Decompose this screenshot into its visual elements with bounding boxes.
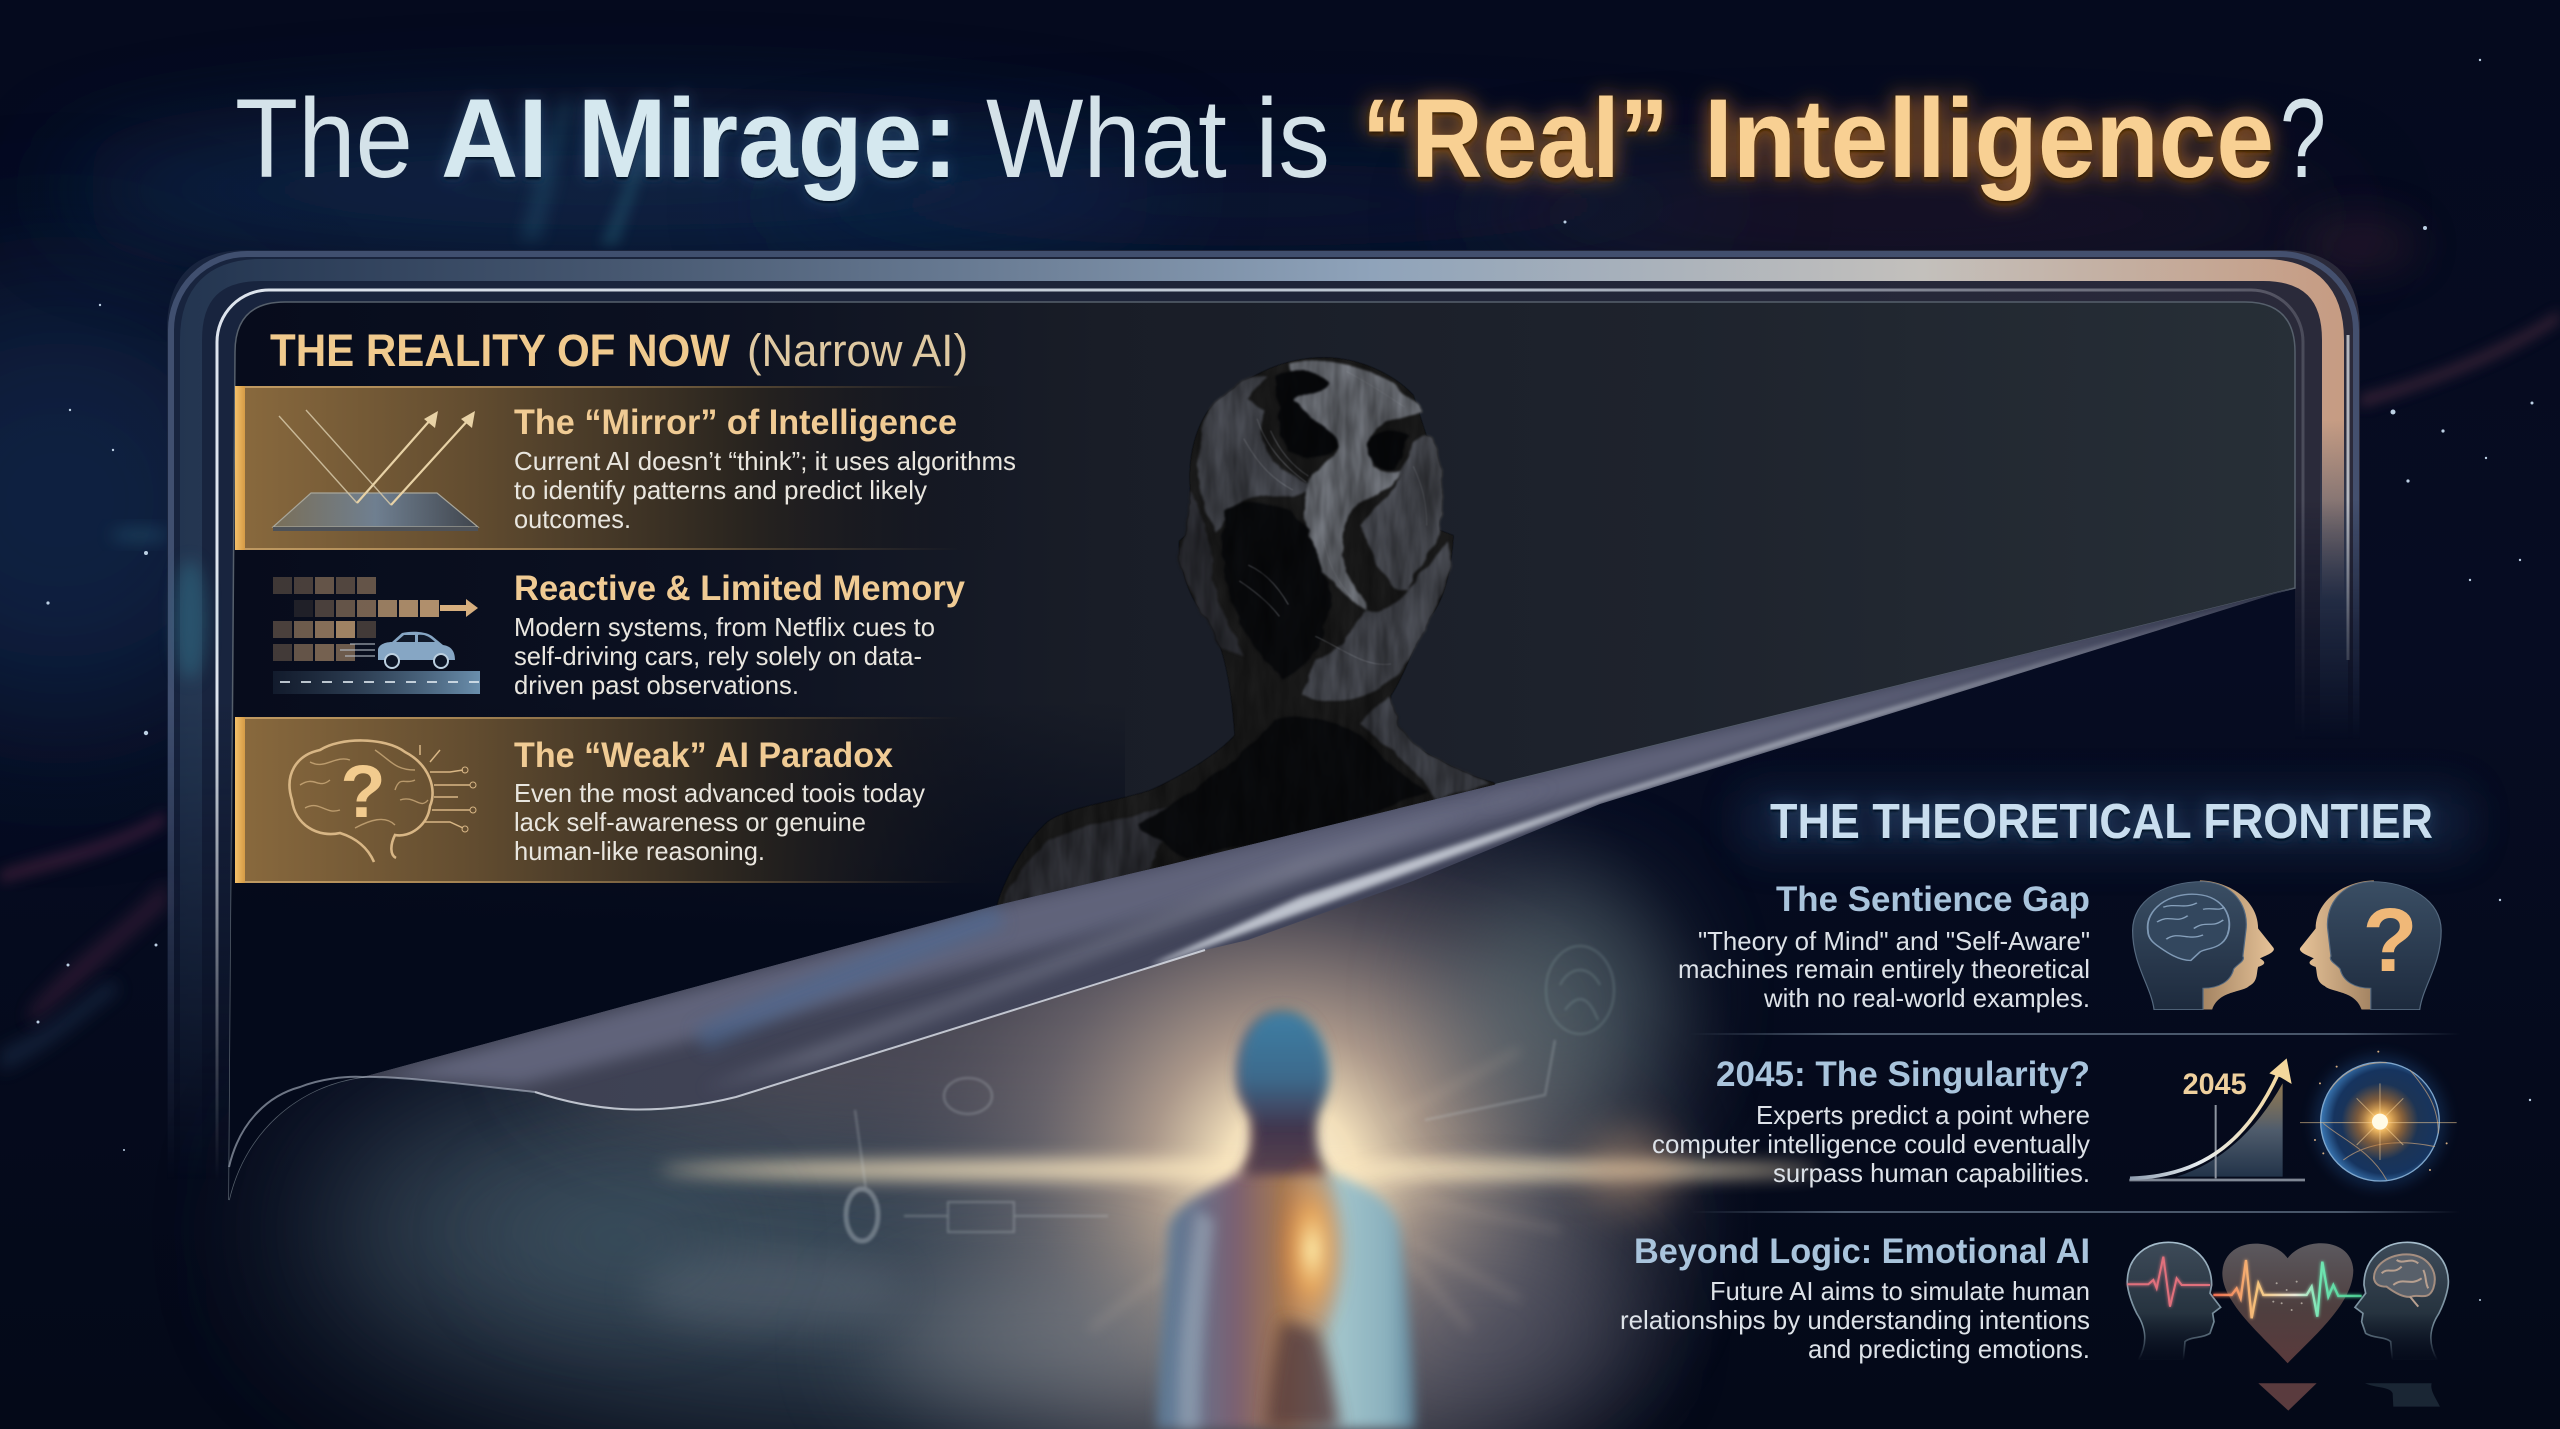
text: mirror card: outcomes.: [514, 504, 631, 534]
heading: the reality of now: THE REALITY OF NOW: [270, 325, 730, 376]
heading: the reality of now: (Narrow AI): [747, 325, 968, 376]
text: memory card: Modern systems, from Netflix cues to: [514, 612, 935, 642]
skull and hair masses: [1198, 375, 1315, 533]
panel: reactive and limited memory: [273, 569, 966, 700]
text: sentience gap: The Sentience Gap: [1776, 880, 2090, 919]
icon: facing heads with brain and question mark: [2133, 880, 2441, 1010]
text: emotional AI: [1620, 1232, 2090, 1364]
panel: weak AI paradox card: [235, 717, 1010, 883]
dark cavities: [1275, 371, 1340, 458]
text: memory card: driven past observations.: [514, 670, 799, 700]
icon: brain with question mark and circuits: [290, 740, 476, 862]
bust: fractured dark sculpted head: [996, 357, 1496, 905]
text: mirror card: Current AI doesn’t “think”; it uses algorithms: [514, 446, 1016, 476]
panel: upper dark screen: [225, 302, 2295, 1200]
icon: facing heads with brain and question mark: ?: [2363, 891, 2417, 991]
reflection: mirrored heart and head below: [2258, 1383, 2440, 1411]
text: weak AI card: human-like reasoning.: [514, 836, 765, 866]
figure: glowing human silhouette: [1157, 1010, 1415, 1429]
text: memory card: [514, 569, 966, 700]
panel: theoretical frontier backdrop and heading: THE THEORETICAL FRONTIER: [1770, 795, 2433, 849]
text: memory card: Reactive & Limited Memory: [514, 569, 966, 608]
text: mirror card: [514, 403, 1016, 534]
text: mirror card: to identify patterns and predict likely: [514, 475, 927, 505]
text: singularity: 2045: The Singularity?: [1716, 1055, 2090, 1094]
text: weak AI card: [514, 736, 925, 866]
text: mirror card: The “Mirror” of Intelligence: [514, 403, 957, 442]
faint ghost diagrams: [846, 946, 1614, 1241]
panel: mirror of intelligence card: [235, 386, 1016, 550]
frame: metallic device bezel: [167, 250, 2360, 1160]
text: sentience gap: [1678, 880, 2090, 1013]
text: weak AI card: Even the most advanced toois today: [514, 778, 925, 808]
title: The: [235, 76, 413, 201]
text: weak AI card: lack self-awareness or genuine: [514, 807, 866, 837]
panel: beyond logic emotional AI: [1620, 1232, 2448, 1411]
text: sentience gap: machines remain entirely theoretical: [1678, 954, 2090, 984]
lower scene: luminous horizon: [310, 700, 1820, 1429]
text: singularity: [1652, 1055, 2090, 1188]
chart: exponential curve to 2045: [2129, 1058, 2305, 1180]
text: singularity: surpass human capabilities.: [1773, 1158, 2090, 1188]
text: memory card: self-driving cars, rely solely on data-: [514, 641, 922, 671]
fold: curling page peel dividing the scenes: [229, 588, 2294, 1167]
text: weak AI card: The “Weak” AI Paradox: [514, 736, 894, 775]
icon: data grid, arrow, car and road: [273, 577, 480, 694]
icon: heads connected by heart and heartbeat line: [2127, 1242, 2448, 1363]
text: sentience gap: "Theory of Mind" and "Self-Aware": [1698, 926, 2090, 956]
text: singularity: Experts predict a point where: [1756, 1100, 2090, 1130]
text: emotional AI: Beyond Logic: Emotional AI: [1634, 1232, 2090, 1271]
title: What is: [986, 76, 1330, 201]
chart: exponential curve to 2045: 2045: [2183, 1068, 2247, 1101]
icon: brain with question mark and circuits: ?: [340, 750, 386, 833]
title: ?: [2280, 76, 2326, 201]
icon: cosmic orb with burst: [2300, 1051, 2457, 1188]
title: “Real”: [1362, 76, 1669, 201]
text: sentience gap: with no real-world examples.: [1763, 983, 2090, 1013]
text: emotional AI: Future AI aims to simulate human: [1710, 1276, 2090, 1306]
title: AI Mirage:: [441, 76, 958, 201]
title: Intelligence: [1704, 76, 2274, 201]
title: [235, 76, 2326, 201]
text: emotional AI: relationships by understanding intentions: [1620, 1305, 2090, 1335]
text: singularity: computer intelligence could eventually: [1652, 1129, 2090, 1159]
icon: reflecting mirror with arrows: [273, 410, 478, 531]
text: emotional AI: and predicting emotions.: [1808, 1334, 2090, 1364]
panel: 2045 the singularity: [1652, 1051, 2457, 1188]
panel: the sentience gap: [1678, 880, 2441, 1013]
